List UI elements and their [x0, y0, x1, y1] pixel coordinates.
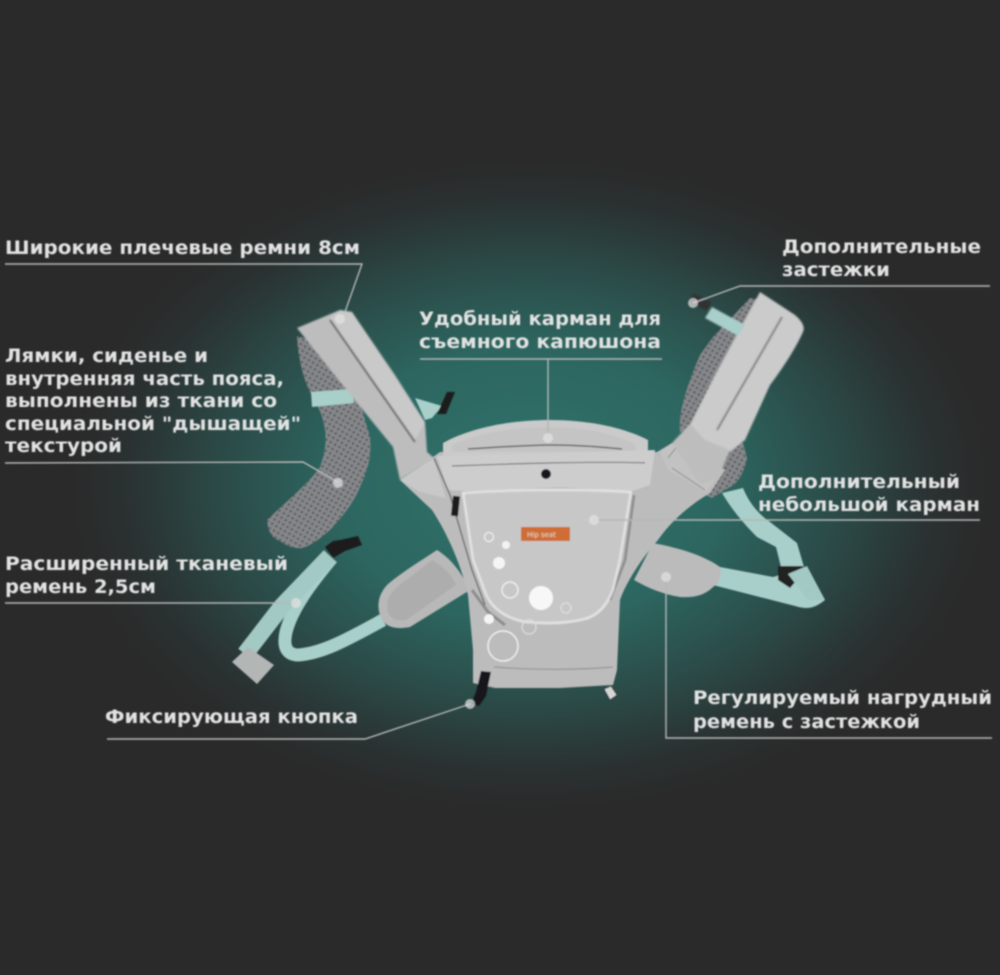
shoulder joint right — [660, 443, 722, 492]
label: chest strap: ремень с застежкой — [693, 712, 920, 733]
leader: hood pocket — [420, 359, 662, 438]
label: chest strap: Регулируемый нагрудный — [693, 688, 992, 709]
label: breathable fabric: Лямки, сиденье и — [5, 346, 208, 367]
label: fabric strap: ремень 2,5см — [5, 577, 156, 598]
label: fabric strap — [5, 554, 288, 598]
right mesh lining — [680, 298, 762, 432]
label: extra fasteners: Дополнительные — [782, 237, 981, 258]
label: breathable fabric — [5, 346, 301, 457]
main body — [400, 420, 725, 688]
bottom buckles — [471, 671, 617, 706]
orange brand label — [521, 527, 570, 541]
label: extra fasteners — [782, 237, 981, 281]
right top teal clip — [689, 293, 745, 336]
side zipper pull — [451, 496, 460, 516]
label: small pocket: Дополнительный — [758, 472, 960, 493]
right chest pad and strap — [634, 543, 825, 608]
right teal strap — [722, 488, 804, 567]
label: fixing button: Фиксирующая кнопка — [105, 707, 358, 728]
hood pocket — [443, 420, 648, 456]
pocket flap — [463, 490, 631, 623]
illustration: baby carrier — [5, 237, 992, 739]
leader: small pocket — [594, 519, 980, 521]
label: breathable fabric: внутренняя часть пояса, — [5, 369, 284, 390]
label: chest strap — [693, 688, 992, 733]
orange brand label: Hip seat — [527, 531, 556, 539]
left padded strap mesh lining — [267, 336, 371, 548]
hood snap button — [541, 469, 551, 479]
label: small pocket — [758, 472, 980, 516]
label: hood pocket: Удобный карман для — [419, 309, 661, 330]
marker dots — [291, 298, 698, 709]
label: fabric strap: Расширенный тканевый — [5, 554, 288, 575]
lower seams — [494, 667, 613, 669]
leader: fixing button — [107, 704, 470, 739]
label: hood pocket — [419, 309, 661, 353]
leader: fabric strap — [5, 602, 296, 604]
label: small pocket: небольшой карман — [758, 495, 980, 516]
label: breathable fabric: специальной "дышащей" — [5, 414, 301, 435]
label: breathable fabric: выполнены из ткани со — [5, 391, 277, 412]
shoulder joint left — [400, 458, 446, 498]
label: hood pocket: съемного капюшона — [419, 332, 661, 353]
left waist strap — [232, 536, 383, 684]
label: breathable fabric: текстурой — [5, 436, 122, 457]
label: shoulder straps: Широкие плечевые ремни 8см — [5, 238, 360, 259]
fold band — [437, 450, 655, 491]
label: extra fasteners: застежки — [782, 260, 890, 281]
right shoulder strap — [672, 292, 804, 484]
left shoulder strap — [297, 310, 434, 480]
left teal strap loop — [311, 389, 354, 407]
leader: chest strap — [666, 577, 992, 738]
leader: extra fasteners — [693, 286, 990, 303]
leader lines — [5, 264, 992, 739]
left strap clip — [415, 392, 455, 420]
leader: shoulder straps — [5, 264, 362, 312]
left chest pad — [378, 550, 470, 628]
leader: breathable fabric — [5, 462, 338, 482]
decorative circles — [484, 532, 571, 661]
